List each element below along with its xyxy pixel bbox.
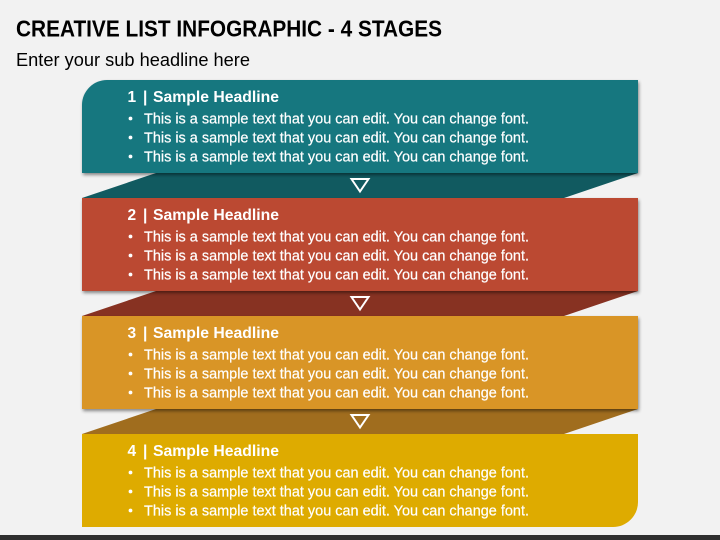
panel 4 text: This is a sample text that you can edit. You can change font. xyxy=(144,466,529,482)
connector band 1 xyxy=(82,173,638,198)
panel 1 text xyxy=(128,89,529,166)
panel 3 text: 3 xyxy=(128,325,136,342)
panel 1 text: This is a sample text that you can edit. You can change font. xyxy=(144,112,529,128)
connector band 3 xyxy=(82,409,638,434)
panel 2 text: Sample Headline xyxy=(153,207,279,224)
panel 4 background xyxy=(82,434,638,527)
icon: arrow 3 xyxy=(352,415,368,428)
panel 2 text: This is a sample text that you can edit. You can change font. xyxy=(144,230,529,246)
panel 3 background xyxy=(82,316,638,409)
panel 1 text: 1 xyxy=(128,89,136,106)
panel 4 text: 4 xyxy=(128,443,136,460)
panel 4 text xyxy=(128,443,529,520)
panel 4 text: Sample Headline xyxy=(153,443,279,460)
connector band 2 xyxy=(82,291,638,316)
icon: arrow 2 xyxy=(352,297,368,310)
subtitle: Enter your sub headline here xyxy=(16,50,250,70)
panel 3 text: Sample Headline xyxy=(153,325,279,342)
panel 4 text: | xyxy=(143,443,147,460)
panel 4 text: This is a sample text that you can edit. You can change font. xyxy=(144,484,529,500)
panel 3 text: This is a sample text that you can edit. You can change font. xyxy=(144,366,529,382)
panel 3 text: This is a sample text that you can edit. You can change font. xyxy=(144,348,529,364)
panel 2 background xyxy=(82,198,638,291)
bottom bar xyxy=(0,535,720,540)
panel 2 text: This is a sample text that you can edit. You can change font. xyxy=(144,268,529,284)
panel 1 text: This is a sample text that you can edit. You can change font. xyxy=(144,130,529,146)
panel 1 text: Sample Headline xyxy=(153,89,279,106)
panel 2 text: This is a sample text that you can edit. You can change font. xyxy=(144,248,529,264)
panel 2 text xyxy=(128,207,529,284)
panel 3 text xyxy=(128,325,529,402)
panel 3 text: This is a sample text that you can edit. You can change font. xyxy=(144,386,529,402)
panel 2 text: | xyxy=(143,207,147,224)
panel 1 text: This is a sample text that you can edit. You can change font. xyxy=(144,150,529,166)
panel 1 background xyxy=(82,80,638,173)
panel 1 text: | xyxy=(143,89,147,106)
icon: arrow 1 xyxy=(352,179,368,192)
panel 4 text: This is a sample text that you can edit. You can change font. xyxy=(144,504,529,520)
panel 2 text: 2 xyxy=(128,207,136,224)
title: CREATIVE LIST INFOGRAPHIC - 4 STAGES xyxy=(16,16,442,42)
panel 3 text: | xyxy=(143,325,147,342)
